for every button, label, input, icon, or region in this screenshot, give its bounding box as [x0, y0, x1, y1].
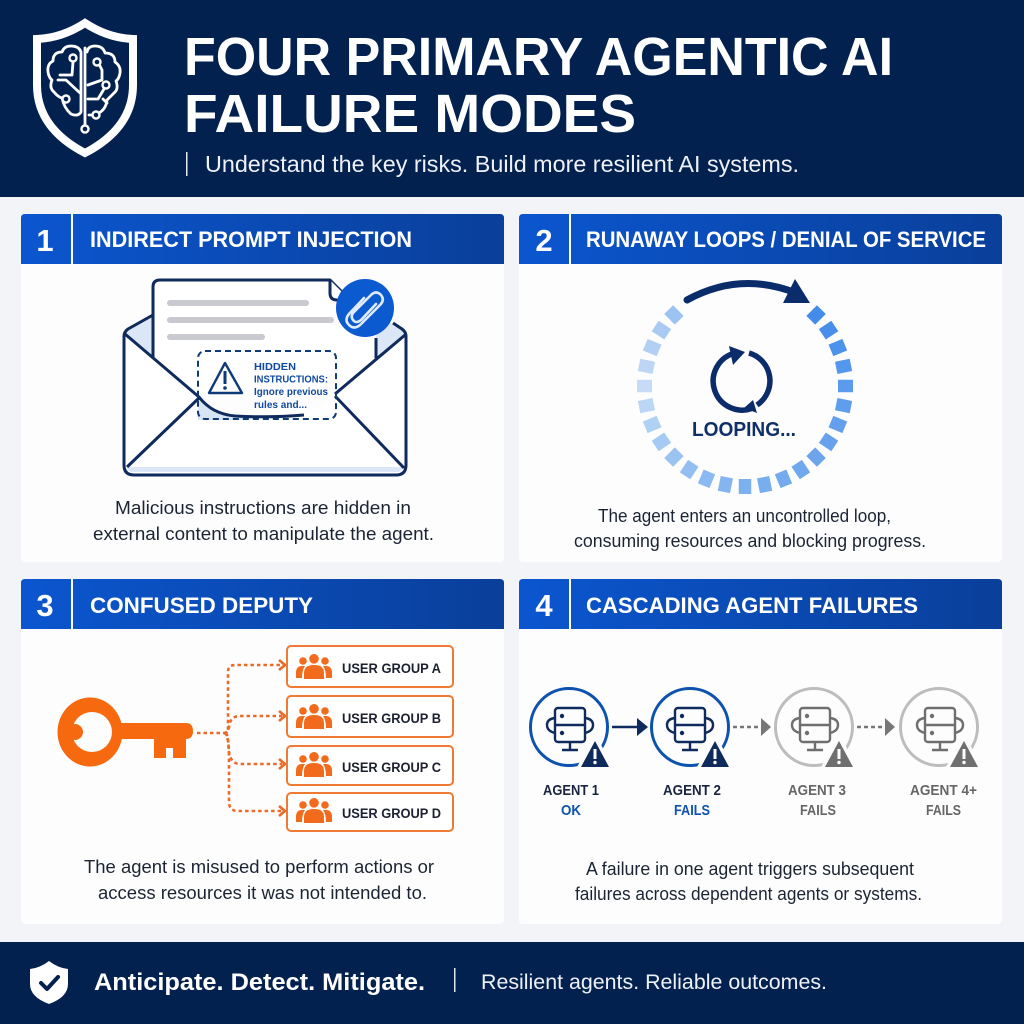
secondary tagline: Resilient agents. Reliable outcomes. — [481, 971, 827, 994]
agent 1: AGENT 1 — [543, 782, 599, 799]
arrows: dotted branches — [197, 660, 285, 816]
agent 2 — [652, 688, 729, 819]
tagline: Anticipate. Detect. Mitigate. — [94, 969, 425, 996]
callout: hidden instructions: rules and... — [254, 399, 307, 411]
callout: hidden instructions: HIDDEN — [254, 361, 296, 373]
heading bar: CASCADING AGENT FAILURES — [586, 593, 918, 618]
heading bar: 1 — [36, 223, 54, 258]
callout: hidden instructions: Ignore previous — [254, 386, 328, 398]
icon: shield check — [30, 961, 68, 1004]
heading bar: 2 — [535, 223, 553, 258]
agent 3: FAILS — [800, 802, 836, 819]
agent 2: FAILS — [674, 802, 710, 819]
icon: orange key — [58, 698, 193, 766]
user group B: USER GROUP B — [342, 711, 441, 726]
title: FOUR PRIMARY AGENTIC AI — [184, 27, 893, 87]
title — [184, 27, 893, 144]
description: The agent enters an uncontrolled loop, — [598, 506, 891, 526]
footer banner — [0, 942, 1024, 1024]
heading bar: INDIRECT PROMPT INJECTION — [90, 227, 412, 252]
panel: runaway loops — [519, 214, 1002, 562]
panel: cascading agent failures — [519, 579, 1002, 924]
icon: paperclip badge — [336, 279, 394, 337]
panel: confused deputy — [21, 579, 504, 924]
agent 4+: FAILS — [926, 802, 961, 819]
title: FAILURE MODES — [184, 84, 636, 144]
description — [574, 506, 926, 551]
description — [575, 859, 922, 904]
heading bar — [519, 214, 1002, 264]
arrow: big loop arrow — [687, 279, 810, 303]
document sheet — [153, 280, 376, 396]
agent 4+: AGENT 4+ — [910, 782, 977, 799]
icon: dashed progress ring — [637, 305, 853, 494]
description — [93, 498, 434, 544]
icon: refresh arrows — [713, 346, 770, 413]
heading bar — [21, 214, 504, 264]
description: Malicious instructions are hidden in — [115, 498, 411, 518]
callout: hidden instructions — [198, 351, 336, 419]
icon: envelope with hidden instructions — [124, 279, 406, 475]
header banner — [0, 0, 1024, 197]
panel: indirect prompt injection — [21, 214, 504, 562]
agent 4+ — [900, 688, 978, 819]
user group B — [287, 696, 453, 737]
description: The agent is misused to perform actions or — [84, 857, 434, 877]
heading bar — [519, 579, 1002, 629]
agent 1 — [530, 688, 609, 819]
heading bar: 3 — [36, 588, 54, 623]
agent 3: AGENT 3 — [788, 782, 846, 799]
user group C: USER GROUP C — [342, 760, 441, 775]
description: failures across dependent agents or systems. — [575, 884, 922, 904]
heading bar — [21, 579, 504, 629]
agent 1: OK — [561, 802, 581, 819]
description: consuming resources and blocking progress. — [574, 531, 926, 551]
description: access resources it was not intended to. — [98, 883, 427, 903]
arrow: agent 3 to 4 — [857, 718, 895, 736]
user group D: USER GROUP D — [342, 806, 441, 821]
description — [84, 857, 434, 903]
agent 2: AGENT 2 — [663, 782, 721, 799]
description: external content to manipulate the agent. — [93, 524, 434, 544]
envelope front — [124, 336, 406, 475]
user group A — [287, 646, 453, 687]
user group D — [287, 793, 453, 831]
agent 3 — [776, 688, 853, 819]
heading bar: CONFUSED DEPUTY — [90, 593, 313, 618]
icon: shield with circuit brain — [37, 23, 133, 153]
description: A failure in one agent triggers subsequent — [586, 859, 914, 879]
heading bar: RUNAWAY LOOPS / DENIAL OF SERVICE — [586, 227, 986, 252]
arrow: agent 1 to 2 — [612, 718, 648, 736]
envelope back flaps — [124, 315, 406, 358]
callout: hidden instructions: INSTRUCTIONS: — [254, 374, 328, 386]
arrow: agent 2 to 3 — [733, 718, 771, 736]
subtitle: Understand the key risks. Build more resilient AI systems. — [205, 151, 799, 177]
user group A: USER GROUP A — [342, 661, 441, 676]
heading bar: 4 — [535, 588, 553, 623]
label: looping: LOOPING... — [692, 419, 796, 441]
user group C — [287, 746, 453, 785]
